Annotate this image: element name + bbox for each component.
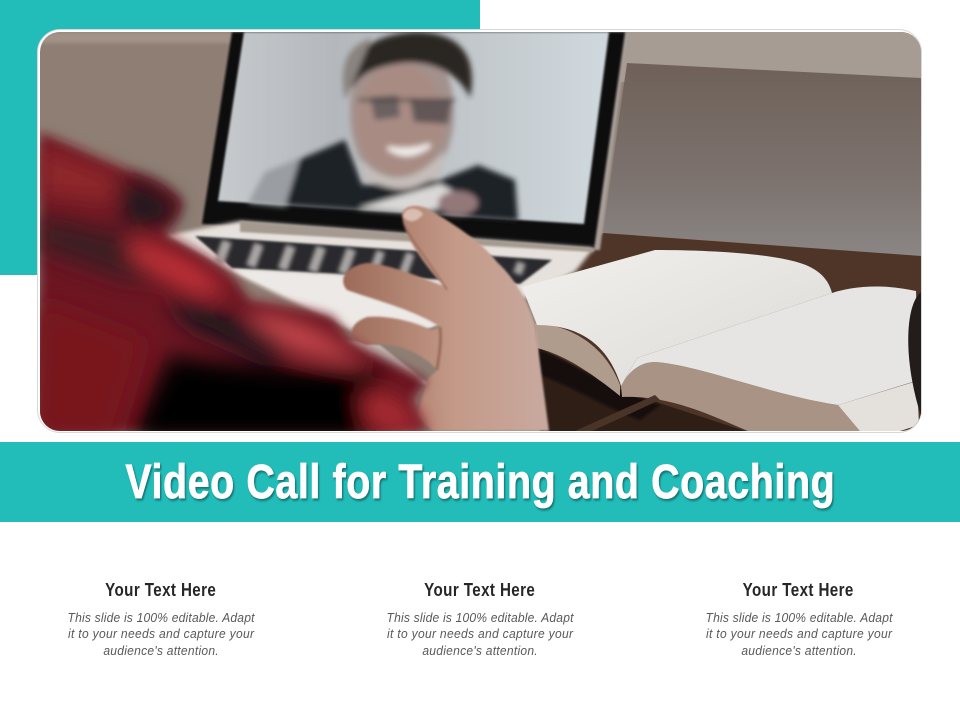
open book [522,250,919,431]
text block: column 3 [706,580,893,658]
body [387,611,574,658]
heading: Your Text Here [105,580,216,600]
title banner [0,442,960,522]
body: This slide is 100% editable. Adapt [706,611,893,625]
body [706,611,893,658]
body: it to your needs and capture your [706,627,893,641]
body: audience's attention. [422,644,538,658]
body: This slide is 100% editable. Adapt [68,611,255,625]
man on the screen [248,32,518,221]
text block: column 2 [387,580,574,658]
title: Video Call for Training and Coaching [125,455,835,509]
hand [343,206,549,431]
body [68,611,255,658]
text block: column 1 [68,580,255,658]
body: audience's attention. [103,644,219,658]
plaid red shirt [30,133,427,440]
body: This slide is 100% editable. Adapt [387,611,574,625]
wooden table [540,233,921,431]
laptop screen [202,32,628,250]
dark object at right edge [908,292,921,416]
teal corner block [0,0,480,275]
body: it to your needs and capture your [68,627,255,641]
photo: video call on laptop with open book [30,32,921,440]
heading: Your Text Here [424,580,535,600]
body: audience's attention. [741,644,857,658]
background wall [40,32,921,431]
laptop base and keyboard [165,221,594,385]
photo frame [38,30,922,432]
heading: Your Text Here [743,580,853,600]
body: it to your needs and capture your [387,627,574,641]
